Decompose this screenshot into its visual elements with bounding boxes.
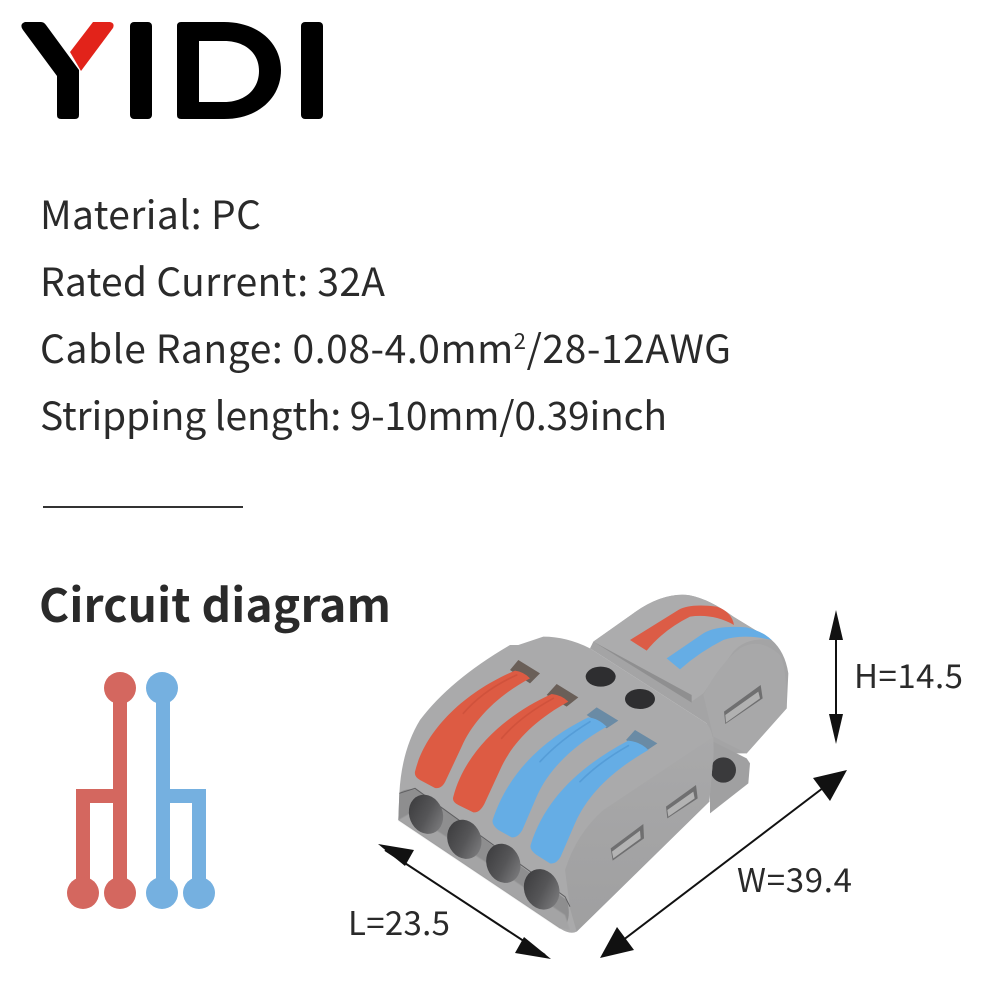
spec: rated current: Rated Current: 32A [40, 252, 385, 308]
spec: material: Material: PC [40, 185, 261, 241]
label: width: W=39.4 [737, 854, 852, 902]
foot mounting hole [711, 757, 736, 783]
rear module side face [703, 644, 787, 753]
dimension arrow: height [829, 610, 843, 744]
blue lever 2 [530, 741, 648, 864]
front face seam [399, 788, 570, 907]
dimension arrow: length [378, 844, 551, 959]
rear module front edge [593, 642, 692, 703]
main housing [398, 637, 714, 933]
logo letter I [301, 22, 323, 119]
front face lower lip [398, 813, 570, 930]
logo letter I [130, 22, 152, 119]
specification text block [40, 185, 731, 442]
heading: circuit diagram: Circuit diagram [39, 570, 391, 636]
lower rear foot [710, 740, 750, 813]
spec: cable range: 2 [514, 324, 526, 356]
front face [398, 789, 569, 928]
rear module body [590, 595, 788, 753]
circuit diagram: blue line [146, 672, 215, 909]
main housing side windows [611, 824, 644, 861]
circuit diagram: red line [67, 672, 136, 909]
logo: YIDI [21, 22, 323, 119]
side face [565, 737, 713, 932]
wire entry holes [403, 790, 565, 915]
top mounting holes [586, 667, 616, 687]
spec: cable range: /28-12AWG [527, 319, 731, 375]
lever ridges [463, 675, 628, 782]
red lever 2 [453, 694, 568, 812]
spec: cable range: Cable Range: 0.08-4.0mm [40, 319, 513, 375]
lever slots [510, 660, 540, 683]
divider line [43, 506, 243, 508]
label: length: L=23.5 [348, 897, 450, 945]
logo red accent [70, 22, 114, 71]
spec: stripping length: Stripping length: 9-10mm/0.39inch [40, 386, 667, 442]
dimension arrow: width [600, 770, 847, 958]
red lever 1 [415, 671, 530, 788]
rear module top plate [593, 595, 772, 702]
logo letter Y [21, 22, 79, 119]
blue lever 1 [493, 717, 607, 837]
logo letter D [177, 22, 281, 119]
product photo: connector illustration [398, 595, 788, 933]
label: height: H=14.5 [854, 650, 963, 698]
rear module side window [724, 685, 763, 724]
rear module blue lever [667, 627, 772, 669]
rear module red lever [630, 606, 734, 651]
